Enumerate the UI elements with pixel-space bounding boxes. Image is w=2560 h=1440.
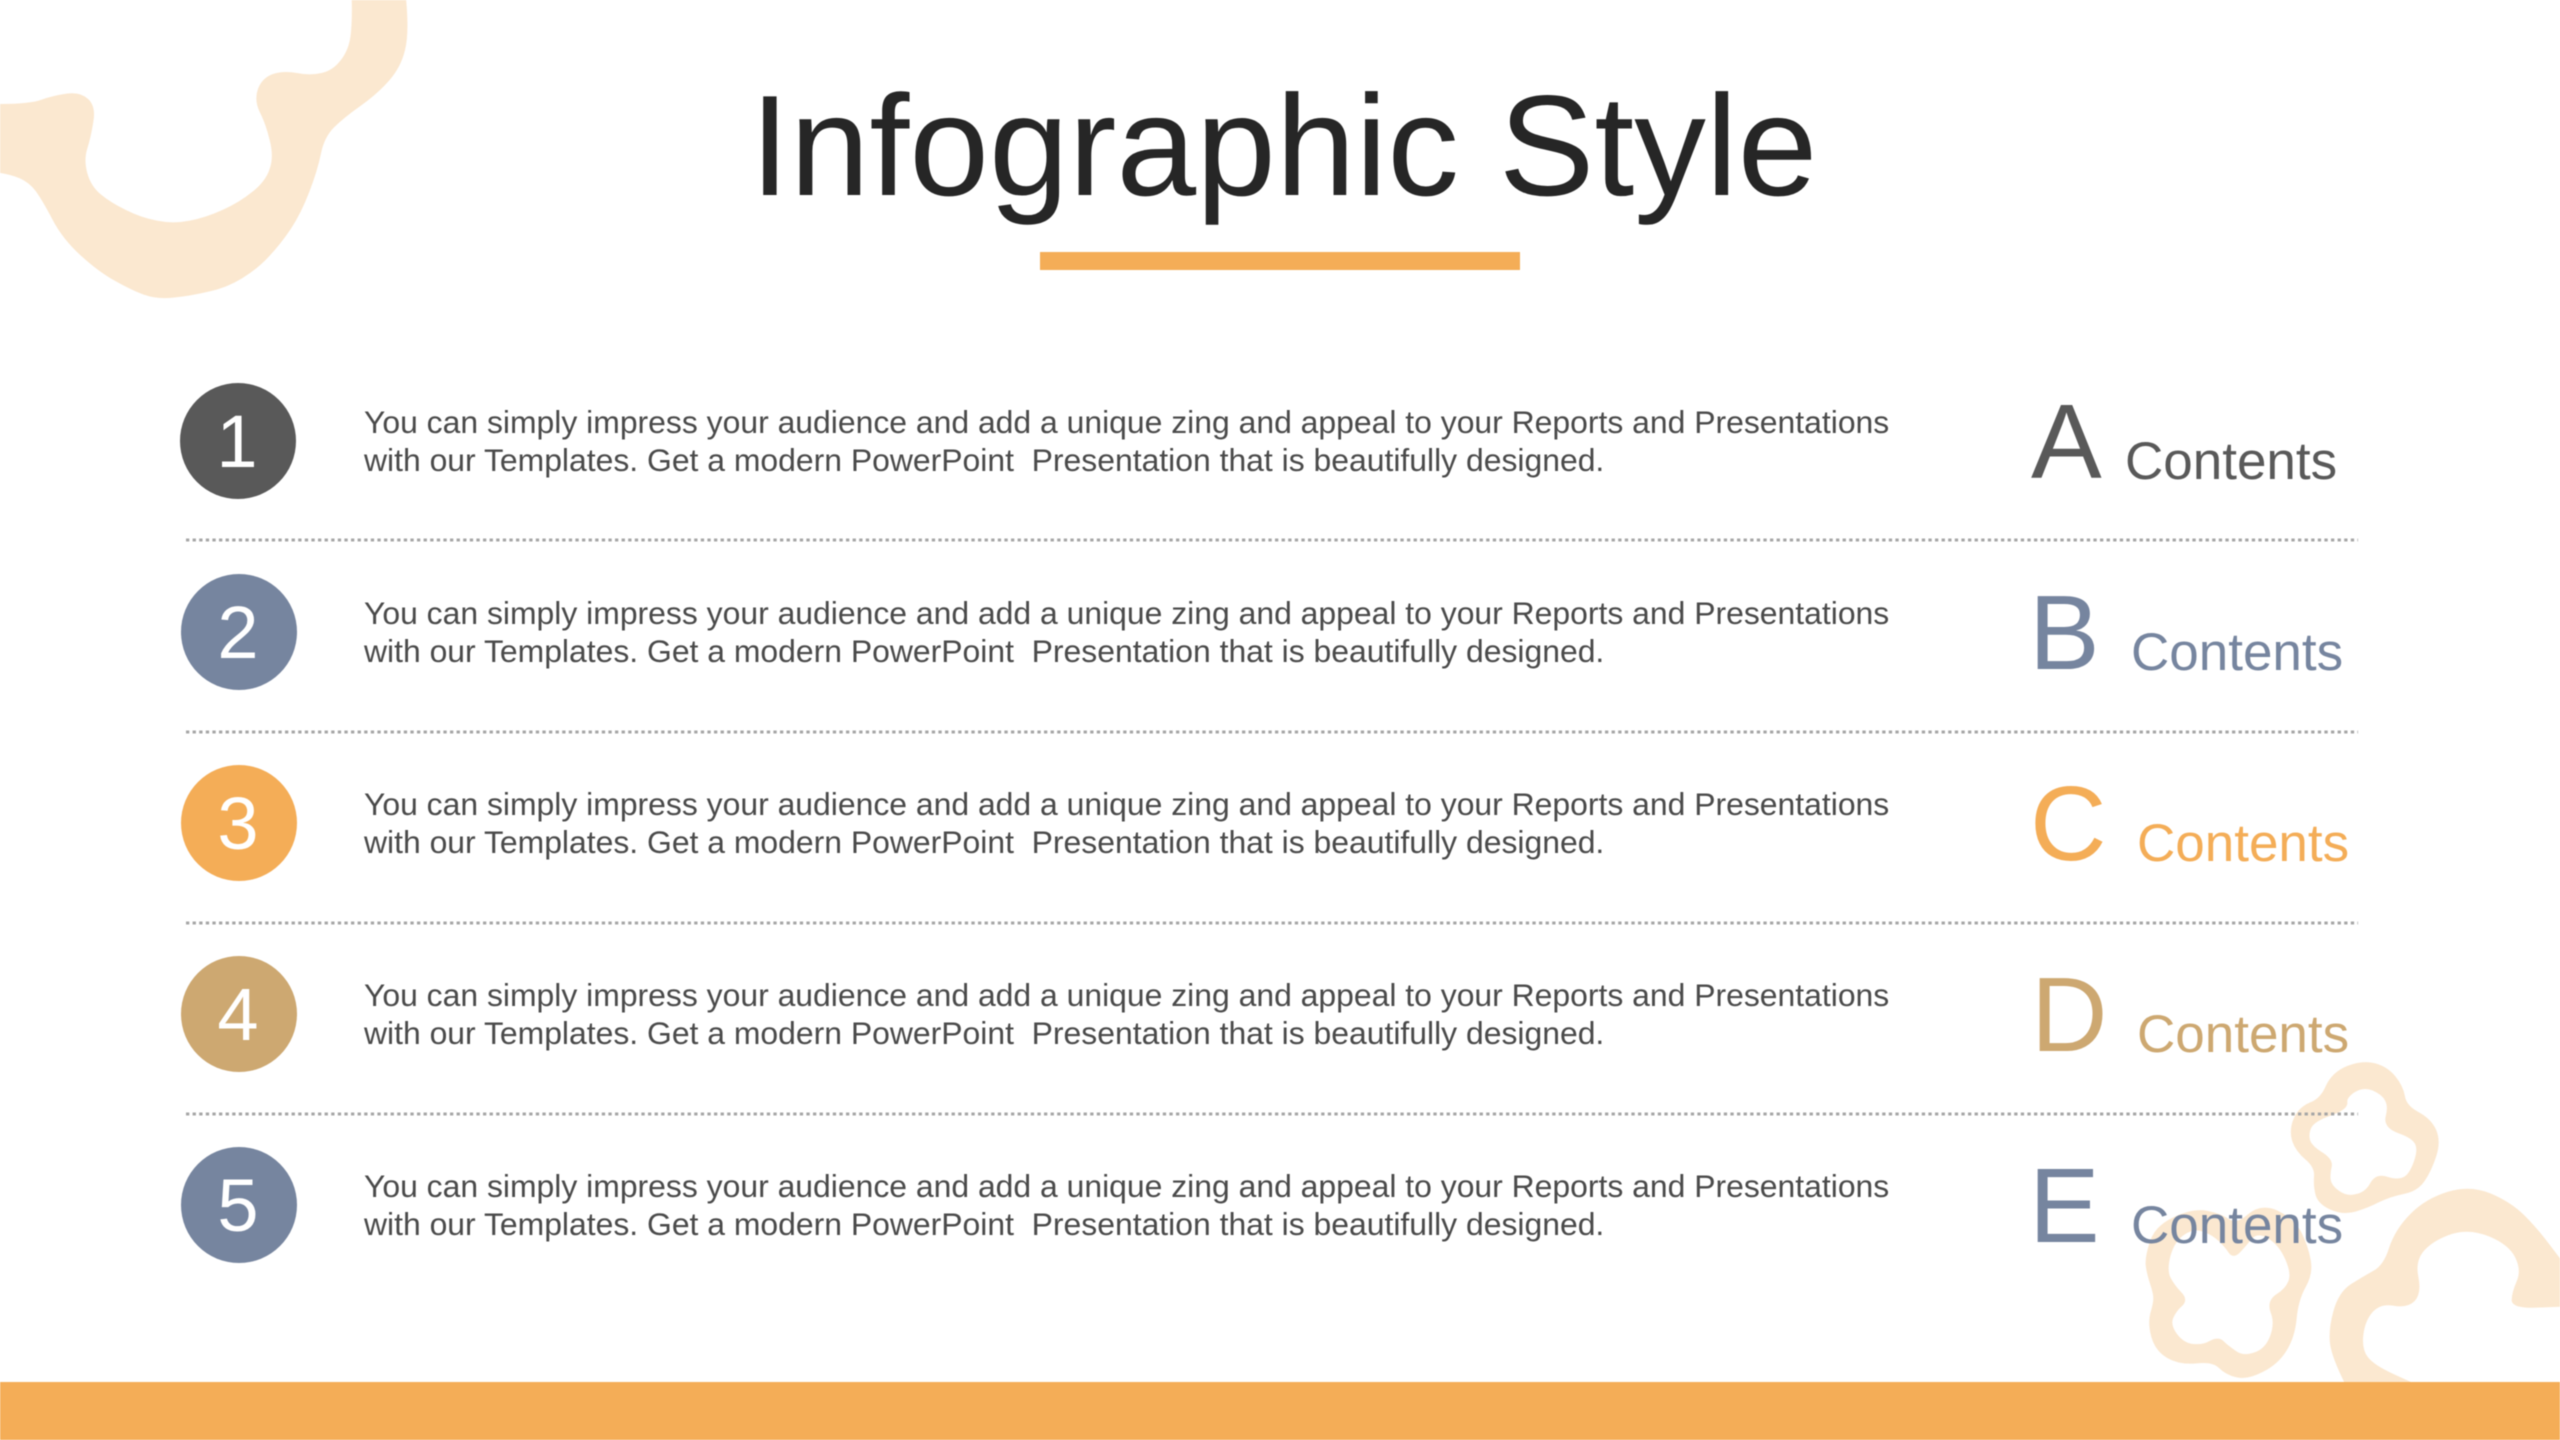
- row 4: [181, 956, 2349, 1074]
- number badge 1: [180, 383, 296, 499]
- label D Contents: D: [2031, 956, 2108, 1074]
- description 2: with our Templates. Get a modern PowerPoint Presentation that is beautifully designed.: [363, 633, 1604, 669]
- label E Contents: E: [2029, 1147, 2100, 1265]
- row 5: [181, 1147, 2343, 1265]
- label B Contents: Contents: [2131, 623, 2343, 682]
- label B Contents: [2029, 574, 2343, 692]
- description 1: with our Templates. Get a modern PowerPoint Presentation that is beautifully designed.: [363, 442, 1604, 478]
- number badge 2: 2: [217, 591, 259, 674]
- description 3: with our Templates. Get a modern PowerPoint Presentation that is beautifully designed.: [363, 824, 1604, 860]
- label C Contents: C: [2030, 765, 2107, 883]
- title underline: [1040, 252, 1520, 270]
- row 2: [181, 574, 2343, 692]
- label A Contents: A: [2031, 383, 2102, 501]
- description 4: with our Templates. Get a modern PowerPoint Presentation that is beautifully designed.: [363, 1015, 1604, 1051]
- title: Infographic Style: [750, 66, 1817, 226]
- number badge 5: 5: [217, 1164, 259, 1247]
- label C Contents: Contents: [2137, 814, 2349, 873]
- label C Contents: [2030, 765, 2349, 883]
- description 1: You can simply impress your audience and add a unique zing and appeal to your Reports and Presentations: [364, 404, 1889, 440]
- description 4: You can simply impress your audience and add a unique zing and appeal to your Reports and Presentations: [364, 977, 1889, 1013]
- label A Contents: Contents: [2125, 432, 2337, 491]
- bottom bar: [0, 1382, 2560, 1440]
- label E Contents: [2029, 1147, 2343, 1265]
- description 5: You can simply impress your audience and add a unique zing and appeal to your Reports and Presentations: [364, 1168, 1889, 1204]
- description 3: You can simply impress your audience and add a unique zing and appeal to your Reports and Presentations: [364, 786, 1889, 822]
- number badge 4: [181, 956, 297, 1072]
- label E Contents: Contents: [2131, 1196, 2343, 1255]
- number badge 3: 3: [217, 782, 259, 865]
- decorative flowers: bottom right: [2147, 1064, 2560, 1383]
- label A Contents: [2031, 383, 2337, 501]
- number badge 4: 4: [217, 973, 259, 1056]
- row 3: [181, 765, 2349, 883]
- number badge 1: 1: [216, 400, 258, 483]
- number badge 5: [181, 1147, 297, 1263]
- label B Contents: B: [2029, 574, 2100, 692]
- label D Contents: Contents: [2137, 1005, 2349, 1064]
- decorative blob: top left: [0, 0, 406, 297]
- number badge 2: [181, 574, 297, 690]
- description 2: You can simply impress your audience and add a unique zing and appeal to your Reports and Presentations: [364, 595, 1889, 631]
- number badge 3: [181, 765, 297, 881]
- row 1: [180, 383, 2337, 501]
- label D Contents: [2031, 956, 2349, 1074]
- description 5: with our Templates. Get a modern PowerPoint Presentation that is beautifully designed.: [363, 1206, 1604, 1242]
